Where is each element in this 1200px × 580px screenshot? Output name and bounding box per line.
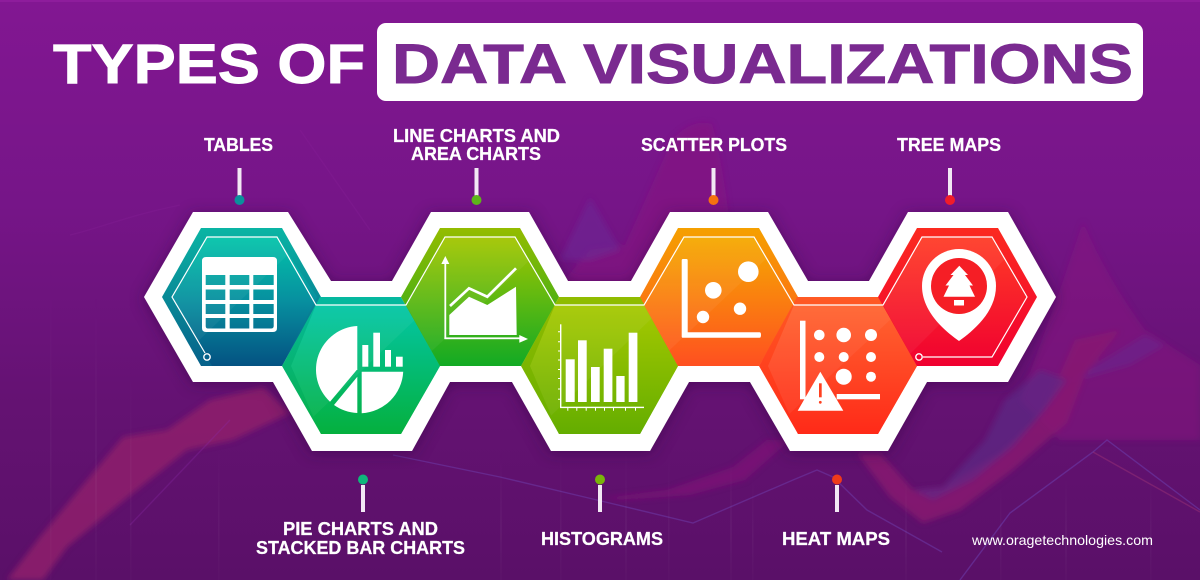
icon: heat map with warning xyxy=(798,321,880,411)
label: tree maps: TREE MAPS xyxy=(897,135,1001,155)
label: histograms xyxy=(541,474,663,549)
panel: scatter plots hexagon xyxy=(640,228,798,366)
panel: line charts hexagon xyxy=(401,228,559,366)
label: line charts and area charts xyxy=(393,126,560,205)
white hexagon frame xyxy=(144,212,1056,451)
panel: pie charts hexagon xyxy=(282,297,440,434)
title text: types of: TYPES OF xyxy=(53,32,365,95)
label: pie charts and stacked bar charts: PIE CHARTS AND xyxy=(283,519,438,539)
icon: location pin with tree xyxy=(922,249,996,341)
icon: line and area chart xyxy=(441,256,528,343)
panel: tables hexagon xyxy=(162,228,321,366)
label: scatter plots xyxy=(641,135,787,205)
label: pie charts and stacked bar charts xyxy=(256,474,465,558)
label: scatter plots: SCATTER PLOTS xyxy=(641,135,787,155)
label: histograms: HISTOGRAMS xyxy=(541,529,663,549)
label: line charts and area charts: LINE CHARTS AND xyxy=(393,126,560,146)
icon: pie and bars xyxy=(316,326,403,413)
label: line charts and area charts: AREA CHARTS xyxy=(411,144,541,164)
label: pie charts and stacked bar charts: STACKED BAR CHARTS xyxy=(256,538,465,558)
label: tables xyxy=(204,135,273,205)
label: heat maps xyxy=(782,474,890,549)
label: heat maps: HEAT MAPS xyxy=(782,529,890,549)
title pill xyxy=(377,23,1143,101)
panel: heat maps hexagon xyxy=(759,297,917,434)
icon: scatter plot xyxy=(682,259,761,338)
label: tree maps xyxy=(897,135,1001,205)
icon: histogram xyxy=(558,324,644,411)
panel: tree maps hexagon xyxy=(878,228,1037,366)
website url: www.oragetechnologies.com xyxy=(971,532,1153,548)
label: tables: TABLES xyxy=(204,135,273,155)
connector outline running through hexagons xyxy=(172,237,1027,360)
title text: data visualizations: DATA VISUALIZATIONS xyxy=(392,32,1133,95)
panel: histograms hexagon xyxy=(521,297,678,434)
icon: table xyxy=(202,257,277,332)
title xyxy=(53,23,1143,101)
